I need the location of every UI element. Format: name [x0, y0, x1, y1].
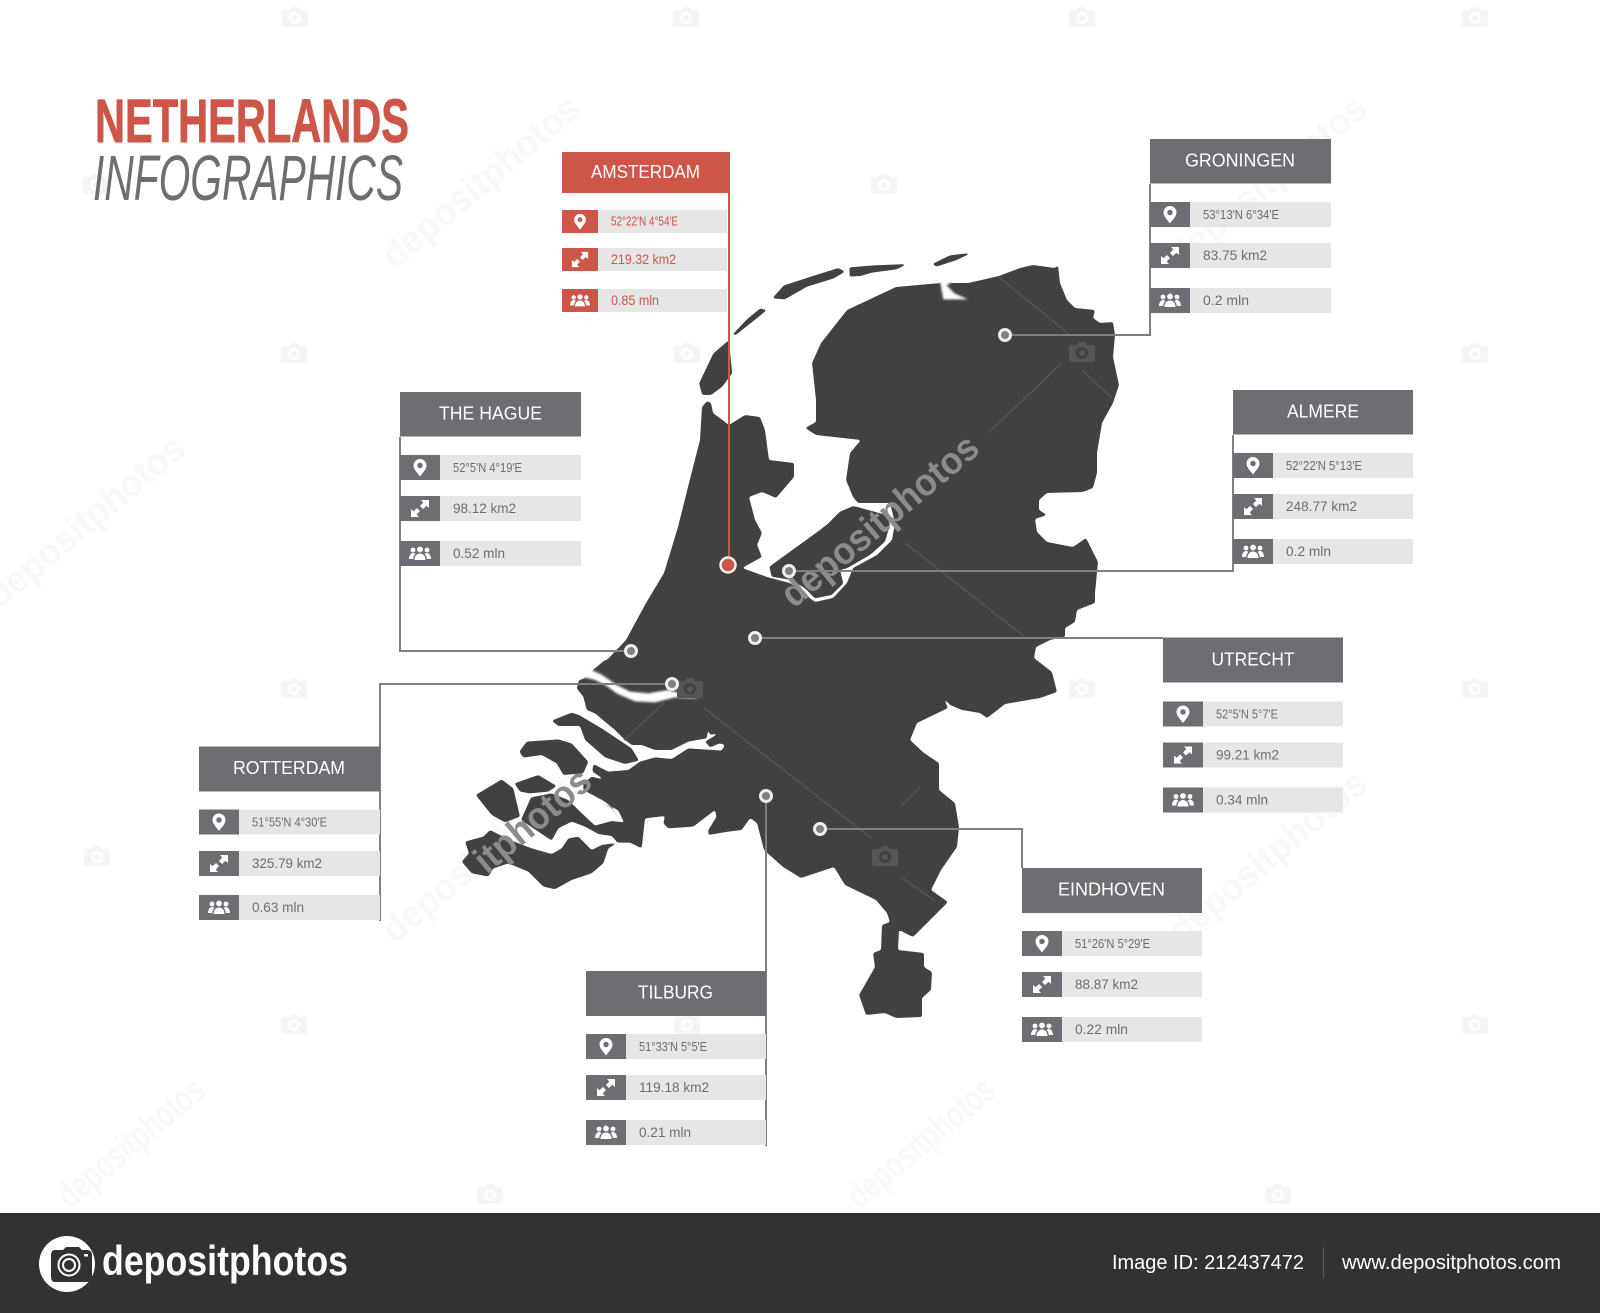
row: coordinates: [1163, 702, 1343, 726]
row: population: [586, 1120, 766, 1145]
watermark text on background: depositphotos: [374, 87, 588, 277]
row: population: 0.2 mln: [1203, 293, 1249, 308]
title: NETHERLANDS: [95, 87, 409, 155]
row: area: [586, 1075, 766, 1100]
heading: Utrecht: [1163, 638, 1343, 682]
row: area: 248.77 km2: [1286, 499, 1357, 514]
row: coordinates: [1233, 453, 1413, 478]
row: population: 0.21 mln: [639, 1125, 691, 1140]
watermark text on background: depositphotos: [49, 1069, 214, 1217]
faint watermark lines on the map: [624, 277, 1112, 901]
row: area: [199, 851, 380, 876]
heading: Rotterdam: [199, 746, 380, 792]
panel: Rotterdam: [199, 746, 380, 920]
heading: Tilburg: [586, 971, 766, 1016]
website: www.depositphotos.com: [1341, 1252, 1561, 1274]
connector: Eindhoven: [820, 829, 1022, 868]
title: INFOGRAPHICS: [93, 142, 403, 214]
row: coordinates: [1022, 931, 1202, 956]
heading: The Hague: [400, 392, 581, 436]
heading: Amsterdam: [562, 152, 729, 193]
Noord-Beveland: [514, 775, 557, 793]
marker: Amsterdam: [720, 558, 736, 572]
watermark on the map: depositphotos: [773, 426, 987, 616]
Flevoland: [769, 506, 890, 598]
marker: Groningen: [1000, 330, 1010, 340]
row: area: 88.87 km2: [1075, 977, 1138, 992]
row: population: 0.2 mln: [1286, 544, 1331, 559]
heading: Tilburg: TILBURG: [638, 982, 713, 1002]
row: coordinates: 52°22'N 5°13'E: [1286, 459, 1362, 473]
heading: Eindhoven: EINDHOVEN: [1058, 878, 1165, 900]
row: coordinates: 52°5'N 5°7'E: [1216, 708, 1278, 722]
row: area: 99.21 km2: [1216, 748, 1279, 762]
panel: The Hague: [400, 392, 581, 566]
connector: Rotterdam: [380, 684, 672, 921]
image id: Image ID: 212437472: [1112, 1252, 1304, 1274]
main land: north, east and south: [605, 265, 1119, 1018]
connector: Tilburg: [765, 796, 767, 1146]
Vlieland: [731, 308, 767, 336]
Texel: [699, 340, 732, 395]
connector: The Hague: [400, 437, 631, 651]
row: area: [1022, 972, 1202, 997]
Terschelling: [772, 268, 845, 299]
row: population: [1233, 539, 1413, 564]
separator: [1323, 1247, 1324, 1278]
Zeeuws-Vlaanderen: [462, 830, 618, 889]
panel: Amsterdam: [562, 152, 729, 312]
row: population: 0.85 mln: [611, 293, 659, 308]
watermark text on background: depositphotos: [374, 762, 588, 952]
row: area: 219.32 km2: [611, 252, 676, 267]
watermark text on background: [0, 87, 1375, 1217]
row: area: [400, 496, 581, 521]
marker: Eindhoven: [814, 824, 826, 834]
heading: Almere: ALMERE: [1287, 400, 1359, 422]
heading: Rotterdam: ROTTERDAM: [233, 757, 345, 778]
row: coordinates: [562, 210, 727, 233]
row: area: 83.75 km2: [1203, 248, 1267, 263]
panel: Almere: [1233, 390, 1413, 564]
row: population: 0.22 mln: [1075, 1022, 1128, 1037]
row: area: [1163, 742, 1343, 768]
watermark text on background: depositphotos: [1161, 762, 1375, 952]
marker: The Hague: [626, 646, 636, 656]
marker: Utrecht: [750, 632, 760, 644]
Schiermonnikoog: [932, 253, 972, 267]
south-west delta: [462, 660, 755, 889]
Lauwersmeer inlet: [940, 282, 968, 299]
delta mainland: [521, 660, 755, 848]
marker: Almere: [784, 566, 794, 576]
panel: Utrecht: [1163, 638, 1343, 812]
row: coordinates: 52°5'N 4°19'E: [453, 461, 522, 475]
row: coordinates: 51°55'N 4°30'E: [252, 816, 327, 830]
row: area: 325.79 km2: [252, 856, 322, 871]
heading: Amsterdam: AMSTERDAM: [591, 161, 700, 182]
connector: Amsterdam: [728, 152, 730, 565]
row: coordinates: 51°33'N 5°5'E: [639, 1040, 707, 1054]
heading: Almere: [1233, 390, 1413, 434]
title: [93, 87, 409, 214]
footer bar: [0, 1213, 1600, 1313]
row: population: 0.63 mln: [252, 900, 304, 915]
panel: Groningen: [1150, 139, 1331, 313]
marker: Tilburg: [760, 790, 772, 802]
watermark cameras on the map: [677, 342, 1095, 866]
watermark text on background: depositphotos: [1161, 87, 1375, 277]
connector: Utrecht: [755, 637, 1163, 639]
row: coordinates: [400, 455, 581, 480]
row: coordinates: [586, 1034, 766, 1059]
Ameland: [850, 264, 908, 277]
Wadden islands: [699, 253, 972, 395]
row: population: 0.34 mln: [1216, 792, 1268, 808]
heading: Groningen: [1150, 139, 1331, 184]
heading: Eindhoven: [1022, 868, 1202, 913]
marker: Rotterdam: [666, 678, 678, 690]
map of the Netherlands: [462, 253, 1119, 1018]
logo wordmark: depositphotos: [102, 1237, 348, 1284]
heading: Utrecht: UTRECHT: [1212, 648, 1294, 670]
row: area: 98.12 km2: [453, 501, 516, 516]
panel: Tilburg: [586, 971, 766, 1145]
watermark text on background: depositphotos: [839, 1069, 1004, 1217]
row: population: [199, 895, 380, 920]
row: area: [562, 248, 727, 271]
row: population: [400, 541, 581, 566]
row: coordinates: [1150, 202, 1331, 227]
sandbar in the channel: [602, 803, 621, 821]
row: area: [1150, 243, 1331, 268]
row: population: [1163, 788, 1343, 812]
connector: Almere: [789, 435, 1233, 571]
icon: depositphotos camera logo: [39, 1236, 95, 1292]
Nieuwe Waterweg river: [582, 669, 698, 702]
Goeree-Overflakkee: [552, 713, 639, 764]
row: population: [1150, 288, 1331, 313]
row: coordinates: 51°26'N 5°29'E: [1075, 937, 1150, 951]
row: area: 119.18 km2: [639, 1080, 709, 1095]
panel: Eindhoven: [1022, 868, 1202, 1042]
watermark on Zeeland: itphotos: [466, 760, 600, 882]
heading: Groningen: GRONINGEN: [1185, 150, 1295, 170]
Walcheren: [476, 779, 520, 822]
row: population: [1022, 1017, 1202, 1042]
heading: The Hague: THE HAGUE: [439, 402, 542, 424]
connector: Groningen: [1005, 184, 1150, 335]
row: population: [562, 289, 727, 312]
row: coordinates: 52°22'N 4°54'E: [611, 214, 678, 228]
Schouwen-Duiveland: [519, 739, 588, 775]
row: coordinates: 53°13'N 6°34'E: [1203, 208, 1279, 222]
row: area: [1233, 494, 1413, 519]
row: coordinates: [199, 810, 380, 834]
row: population: 0.52 mln: [453, 546, 505, 561]
